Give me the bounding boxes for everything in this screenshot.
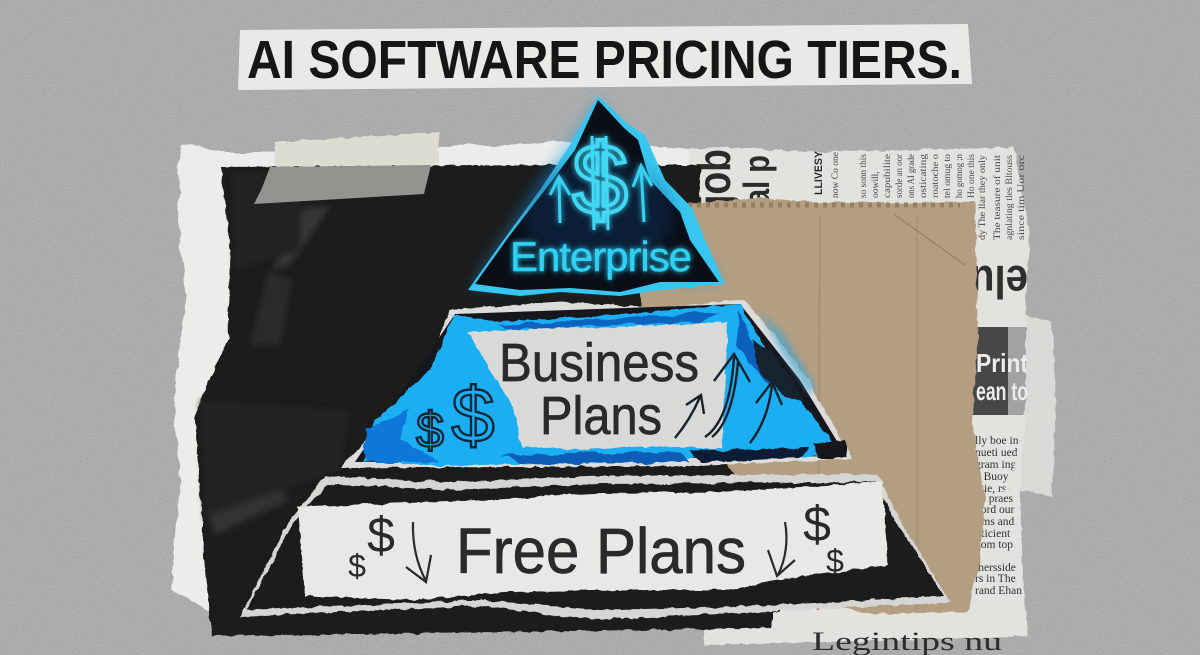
business dark backing xyxy=(355,304,846,462)
business torn white edge xyxy=(340,299,852,468)
newspaper column text: ho gomog ;n xyxy=(955,154,965,198)
newspaper column text: roatoche o xyxy=(931,154,941,198)
business blue paint xyxy=(365,304,846,466)
white torn paper xyxy=(172,142,690,620)
tier 1: enterprise xyxy=(468,96,725,296)
newspaper lower column: rs in The xyxy=(975,573,1016,585)
newspaper lower column: nueti ued xyxy=(975,447,1018,459)
translucent tape right xyxy=(1002,314,1056,498)
enterprise black triangle xyxy=(475,100,719,292)
newspaper column text: The teasure of unit xyxy=(992,155,1003,240)
free dollar icons: $ xyxy=(803,496,831,552)
newspaper column text: oowill, xyxy=(871,171,881,198)
newspaper column text: so sonn this xyxy=(859,154,869,198)
free dollar icons: $ xyxy=(367,507,395,563)
newspaper photo block: ean to xyxy=(976,376,1028,406)
newspaper lower column: iims and xyxy=(975,516,1015,528)
newspaper headline fragments xyxy=(688,149,825,206)
free dollar icons xyxy=(348,496,844,584)
newspaper column text: agnlating tles Bltouss xyxy=(1005,155,1015,240)
tier 3: free plans xyxy=(240,474,950,620)
business dollar icons: $ xyxy=(416,402,444,458)
business label text: Plans xyxy=(540,386,662,446)
tape over white paper xyxy=(275,132,440,166)
newspaper lower column: kord our xyxy=(975,504,1014,516)
newspaper lower column: d Buoy xyxy=(975,471,1009,483)
newspaper bold upside-down word: elu xyxy=(970,256,1028,308)
free down arrows xyxy=(406,522,795,582)
newspaper headline fragments: al p xyxy=(736,155,777,205)
free label text: Free Plans xyxy=(456,515,746,587)
tape over black paper xyxy=(254,165,431,204)
newspaper lower column: rand Ehan xyxy=(975,585,1022,597)
newspaper column text: capubilite xyxy=(883,154,893,198)
title text: AI SOFTWARE PRICING TIERS. xyxy=(247,30,962,90)
title strip xyxy=(238,24,972,90)
newspaper column text: dy The llar they only xyxy=(978,155,988,240)
newspaper lower column: gram ing xyxy=(975,459,1016,471)
newspaper lower column: oom top xyxy=(975,539,1013,551)
newspaper lower column: thersside xyxy=(975,562,1016,574)
newspaper column text: since tim Uor orc xyxy=(1017,155,1027,240)
newspaper column text: now Co one xyxy=(831,152,841,198)
business label paper xyxy=(467,322,728,450)
newspaper lower column: ntie, rs- xyxy=(975,483,1010,495)
masking tape xyxy=(254,132,440,204)
business arrows xyxy=(675,354,782,443)
business dollar icons xyxy=(416,371,495,459)
newspaper headline fragments: job xyxy=(688,149,740,206)
enterprise label: Enterprise xyxy=(510,233,692,280)
newspaper collage background xyxy=(665,147,1030,655)
newspaper column text xyxy=(831,152,1027,240)
newspaper photo block: Print xyxy=(976,348,1028,378)
tier 2: business plans xyxy=(340,299,852,468)
newspaper headline fragments: LLIVESY xyxy=(813,150,825,195)
enterprise arrows xyxy=(550,166,652,223)
free label paper xyxy=(298,482,888,600)
black crumpled paper xyxy=(195,165,780,636)
corrugated cardboard xyxy=(640,198,985,614)
newspaper photo block xyxy=(970,327,1030,415)
newspaper lower column xyxy=(975,435,1022,597)
free torn white edge xyxy=(240,474,950,620)
newspaper lower column: Sticient xyxy=(975,528,1011,540)
business dollar icons: $ xyxy=(451,371,495,459)
newspaper column text: ons AI grade xyxy=(907,154,917,198)
newspaper column text: Ho one this xyxy=(967,154,977,198)
paper creases xyxy=(200,172,350,535)
enterprise cyan border xyxy=(468,96,725,296)
blue paint bleed on cardboard xyxy=(760,312,815,395)
lower newspaper scrap xyxy=(772,612,1028,636)
newspaper column text: tel omug to xyxy=(943,154,953,198)
free black backing xyxy=(246,482,944,610)
newspaper column text: sorde an oor xyxy=(895,153,905,198)
business label text: Business xyxy=(499,333,699,393)
free dollar icons: $ xyxy=(348,548,366,584)
enterprise dollar icon: $ xyxy=(572,124,628,236)
newspaper column text: osticating xyxy=(919,154,929,198)
cardboard ridges xyxy=(688,205,965,610)
newspaper lower column: ey praes xyxy=(975,493,1014,505)
free dollar icons: $ xyxy=(826,543,844,579)
newspaper lower column: lly boe in- xyxy=(975,435,1022,447)
enterprise glow xyxy=(470,97,722,288)
business label text xyxy=(499,333,699,446)
